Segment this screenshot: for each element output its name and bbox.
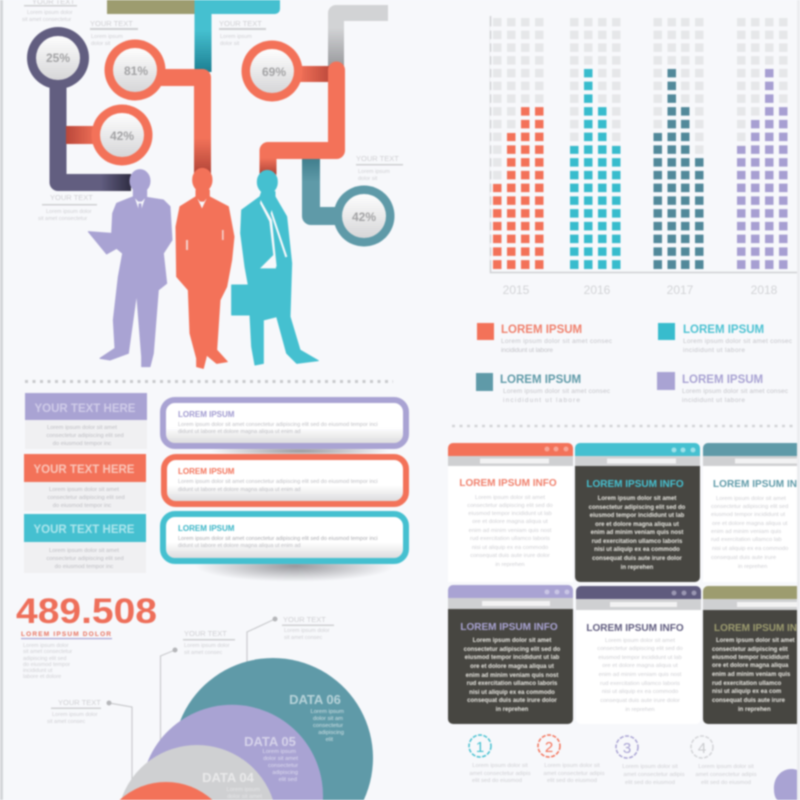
left edge strip bbox=[0, 0, 3, 800]
window 6: consectetur adipiscing elit bbox=[712, 647, 788, 653]
teal pipe bbox=[194, 0, 280, 72]
circle data 05 bbox=[141, 705, 323, 800]
bar group 2018 bbox=[734, 18, 790, 269]
paragraph under number: incididunt ut bbox=[23, 668, 53, 674]
window 3: in reprehen bbox=[738, 564, 767, 570]
leader: data 06: sit amet consec bbox=[284, 635, 322, 641]
leader lines bbox=[47, 615, 334, 780]
panel: text cards left bbox=[24, 393, 147, 573]
percentage: 42% right bbox=[334, 186, 394, 246]
step 2: Lorem ipsum dolor sit bbox=[544, 763, 600, 769]
caption 81%: Lorem ipsum bbox=[91, 34, 123, 40]
bar group 2016 bbox=[567, 18, 623, 269]
window 4: enim ad minim veniam quis nost bbox=[466, 673, 558, 679]
window 3 bbox=[703, 443, 797, 582]
window 6: ore et dolore magna aliqua bbox=[712, 663, 789, 669]
window 1: enim ad minim veniam quis nost bbox=[469, 528, 552, 534]
legend item blue-gray: Lorem ipsum dolor sit amet consec bbox=[503, 388, 611, 395]
window 1: in reprehen bbox=[495, 562, 525, 568]
caption 81%: dolor sit bbox=[91, 41, 111, 47]
circle data 04 bbox=[121, 745, 273, 800]
window 5: eiusmod tempor incididunt ut lab bbox=[598, 655, 682, 661]
people silhouettes bbox=[88, 168, 318, 368]
connector to 42% left bbox=[66, 126, 98, 144]
caption right bbox=[356, 154, 403, 182]
leader: data 06: Lorem ipsum dolor bbox=[284, 628, 330, 634]
caption right: YOUR TEXT bbox=[356, 154, 399, 163]
olive pipe bbox=[107, 0, 199, 14]
card orange: consectetur adipiscing elit sed bbox=[47, 495, 125, 501]
legend item purple bbox=[657, 372, 789, 404]
year labels: 2017 bbox=[667, 283, 694, 297]
window 3: enim ad minim veniam quis bbox=[711, 529, 781, 535]
circle data 04: DATA 04 bbox=[202, 770, 255, 785]
paragraph under number: do eiusmod tempor bbox=[23, 662, 70, 668]
axes bbox=[490, 16, 797, 272]
window 2: rud exercitation ullamco laboris bbox=[592, 539, 683, 545]
panel: pipes and percentages bbox=[27, 0, 394, 246]
card purple: consectetur adipiscing elit sed bbox=[46, 433, 124, 439]
window 2: LOREM IPSUM INFO bbox=[586, 479, 684, 490]
step 4: elit sed do eiusmod bbox=[701, 780, 751, 786]
small shadow purple bbox=[210, 445, 390, 457]
window 2: ore et dolore magna aliqua ut bbox=[595, 522, 679, 528]
paragraph under number: sit amet consectetur bbox=[23, 649, 72, 655]
window 3: rud exercitation ullamco lab bbox=[711, 537, 782, 543]
window 4: ore et dolore magna aliqua ut bbox=[470, 664, 554, 670]
circle data 06: adipiscing bbox=[318, 730, 344, 736]
window 1: eiusmod tempor incididunt ut lab bbox=[468, 511, 552, 517]
legend bbox=[476, 323, 793, 404]
leader: data 04: YOUR TEXT bbox=[58, 698, 101, 707]
card teal: YOUR TEXT HERE bbox=[34, 524, 135, 536]
year labels: 2018 bbox=[751, 283, 778, 297]
card purple bbox=[25, 393, 147, 449]
step 3: Lorem ipsum dolor sit bbox=[622, 764, 678, 770]
step 1 bbox=[469, 735, 531, 784]
circle data 06: DATA 06 bbox=[289, 692, 341, 707]
window 2 bbox=[575, 443, 700, 582]
step 2 bbox=[538, 735, 605, 784]
legend item teal: LOREM IPSUM bbox=[683, 324, 764, 336]
leader: data 05 bbox=[160, 629, 235, 745]
rounded bar orange: Lorem ipsum dolor sit amet consectetur adipiscing elit sed do eiusmod tempor inci bbox=[178, 479, 378, 485]
step 4 bbox=[691, 736, 757, 786]
rounded bar purple bbox=[163, 400, 406, 446]
caption bottom left: Lorem ipsum dolor bbox=[46, 209, 92, 215]
percentage: 42% left: 42% bbox=[110, 129, 134, 143]
chart: square-unit bars bbox=[490, 16, 797, 297]
rounded bar purple: LOREM IPSUM bbox=[178, 410, 235, 419]
rounded bar teal bbox=[163, 514, 406, 561]
rounded bar teal: Lorem ipsum dolor sit amet consectetur adipiscing elit sed do eiusmod tempor inci bbox=[178, 536, 378, 542]
step 4: amet consectetur adipis bbox=[695, 772, 757, 778]
window 4 bbox=[448, 585, 573, 724]
circle data 06: Lorem ipsum bbox=[310, 709, 344, 715]
window 5: consectetur adipiscing elit sed do bbox=[597, 646, 683, 652]
card orange: Lorem ipsum dolor sit amet bbox=[49, 487, 119, 493]
connector from 69% bbox=[298, 66, 332, 82]
percentage: 69%: 69% bbox=[262, 65, 286, 79]
window 4: Lorem ipsum dolor sit amet bbox=[473, 638, 551, 644]
window 5: ore et dolore magna aliqua ut bbox=[602, 663, 678, 669]
window 4: in reprehen bbox=[496, 707, 529, 713]
paragraph under number: Lorem ipsum dolor bbox=[23, 643, 69, 649]
leader: data 04 bbox=[47, 698, 132, 780]
circle data 05: DATA 05 bbox=[244, 734, 296, 749]
circle data 05: Lorem ipsum bbox=[262, 749, 296, 755]
leader: data 04: Lorem ipsum dolor bbox=[52, 712, 98, 718]
step 2: amet consectetur adipis bbox=[543, 771, 605, 777]
leader: data 05: YOUR TEXT bbox=[184, 629, 227, 638]
caption 81%: YOUR TEXT bbox=[90, 19, 133, 28]
percentage: 25% bbox=[27, 27, 89, 89]
legend item teal: incididunt ut labore bbox=[683, 347, 745, 354]
circle data 05: dolor sit amet bbox=[263, 756, 298, 762]
card teal: do eiusmod tempor inc bbox=[55, 564, 113, 570]
window 6: enim ad minim veniam quis bbox=[712, 672, 791, 678]
window 2: Lorem ipsum dolor sit amet bbox=[598, 496, 676, 502]
window 2: nisi ut aliquip ex ea commodo bbox=[594, 547, 680, 553]
paragraph under number bbox=[23, 643, 72, 680]
step 1: 1 bbox=[476, 739, 484, 756]
window 6 bbox=[703, 586, 797, 724]
caption top left: sit amet consectetur bbox=[22, 17, 71, 23]
caption bottom left: YOUR TEXT bbox=[50, 193, 93, 202]
window 1: consequat duis aute irure dolor bbox=[470, 553, 550, 559]
person: teal with briefcase bbox=[232, 170, 318, 365]
legend item blue-gray bbox=[476, 373, 611, 404]
card orange bbox=[24, 454, 146, 511]
numbered steps bbox=[469, 735, 757, 786]
window 2: enim ad minim veniam quis nost bbox=[591, 530, 683, 536]
step 3: amet consectetur adipis bbox=[623, 772, 685, 778]
caption bottom left: sit amet consectetur bbox=[38, 216, 87, 222]
window 5: consequat duis aute irure dolor bbox=[600, 698, 680, 704]
caption right: Lorem ipsum bbox=[358, 169, 390, 175]
subtitle: LOREM IPSUM DOLOR bbox=[21, 631, 111, 638]
circle data 05: elit sed bbox=[279, 777, 297, 783]
caption 81% bbox=[90, 19, 138, 47]
window 4: rud exercitation ullamco laboris bbox=[467, 681, 558, 687]
window 5: rud exercitation ullamco laboris bbox=[600, 681, 680, 687]
step 4: 4 bbox=[698, 740, 706, 757]
window 2: in reprehen bbox=[621, 565, 654, 571]
grid gaps bbox=[490, 28, 546, 258]
step 1: amet consectetur adipis bbox=[469, 771, 531, 777]
caption right: dolor sit bbox=[358, 176, 378, 182]
window 3: ore et dolore magna aliqua ut bbox=[712, 521, 788, 527]
card purple: do eiusmod tempor inc bbox=[53, 441, 111, 447]
window 4: consectetur adipiscing elit sed do bbox=[464, 647, 561, 653]
circle data 05: consectetur bbox=[268, 763, 298, 769]
person: purple bbox=[88, 170, 172, 367]
step 1: elit sed do eiusmod bbox=[472, 778, 522, 784]
legend item orange: incididunt ut labore bbox=[501, 347, 553, 354]
window 1: Lorem ipsum dolor sit amet bbox=[475, 495, 545, 501]
panel: window cards bbox=[448, 443, 797, 724]
window 1: nisi ut aliquip ex ea commodo bbox=[472, 545, 548, 551]
window 6: Lorem ipsum dolor sit amet bbox=[716, 638, 795, 644]
dark pipe bbox=[58, 85, 131, 191]
year labels: 2015 bbox=[503, 283, 530, 297]
percentage: 42% right: 42% bbox=[352, 210, 376, 224]
step 2: 2 bbox=[545, 739, 553, 756]
window 5: nisi ut aliquip ex ea commodo bbox=[602, 689, 678, 695]
rounded bar purple: didunt ut labore et dolore magna aliqua ut enim ad bbox=[178, 429, 301, 435]
window 3: LOREM IPSUM IN bbox=[713, 479, 797, 490]
circle data 05: adipiscing bbox=[272, 770, 298, 776]
leader: data 05: sit amet consec bbox=[184, 650, 222, 656]
percentage: 81% bbox=[104, 40, 166, 100]
window 5: LOREM IPSUM INFO bbox=[586, 623, 684, 634]
bar group 2017 bbox=[650, 18, 706, 269]
circle data 04: dolor sit amet bbox=[227, 794, 262, 800]
window 1: ore et dolore magna aliqua ut bbox=[472, 519, 548, 525]
percentage: 42% left bbox=[92, 104, 152, 166]
step 1: Lorem ipsum dolor sit bbox=[472, 763, 528, 769]
step 3 bbox=[616, 736, 685, 786]
window 2: consectetur adipiscing elit sed do bbox=[589, 505, 686, 511]
window 6: nisi ut aliquip ex ea com bbox=[712, 689, 781, 695]
card orange: YOUR TEXT HERE bbox=[34, 464, 135, 476]
bar group 2015 bbox=[490, 18, 546, 269]
step 2: elit sed do eiusmod bbox=[547, 778, 597, 784]
rounded bar teal: didunt ut labore et dolore magna aliqua ut enim ad bbox=[178, 543, 301, 549]
rounded bar orange: LOREM IPSUM bbox=[178, 467, 235, 476]
window 4: LOREM IPSUM INFO bbox=[460, 622, 558, 633]
legend item orange bbox=[477, 323, 613, 354]
window 3: eiusmod tempor incididunt ut bbox=[711, 512, 786, 518]
window 6: LOREM IPSUM IN bbox=[714, 623, 797, 634]
window 5 bbox=[576, 586, 701, 724]
window 3: consectetur adipiscing elit sed bbox=[711, 504, 788, 510]
chart: nested circles bbox=[120, 658, 373, 800]
legend item teal bbox=[658, 323, 793, 354]
legend item blue-gray: LOREM IPSUM bbox=[500, 374, 581, 386]
window 5: Lorem ipsum dolor sit amet bbox=[605, 638, 675, 644]
window 5: in reprehen bbox=[625, 707, 655, 713]
window 2: eiusmod tempor incididunt ut lab bbox=[590, 513, 685, 519]
window 1: consectetur adipiscing elit sed do bbox=[467, 503, 553, 509]
panel: rounded bars right bbox=[163, 400, 406, 582]
window 5: enim ad minim veniam quis nost bbox=[599, 672, 682, 678]
legend item purple: incididunt ut labore bbox=[682, 397, 745, 404]
orange pipe from 81% bbox=[160, 78, 211, 174]
rounded bar teal: LOREM IPSUM bbox=[178, 524, 235, 533]
card teal bbox=[24, 514, 146, 573]
window 6: rud exercitation ullamco bbox=[712, 681, 782, 687]
year labels: 2016 bbox=[584, 283, 611, 297]
percentage: 81%: 81% bbox=[124, 64, 148, 78]
legend item orange: LOREM IPSUM bbox=[501, 324, 582, 336]
circle data 06: elit bbox=[326, 737, 333, 743]
right edge strip bbox=[797, 0, 800, 800]
window 1 bbox=[448, 443, 573, 582]
legend item orange: Lorem ipsum dolor sit amet consec bbox=[501, 338, 613, 345]
window 6: eiusmod tempor incididunt bbox=[712, 655, 789, 661]
gray pipe bbox=[328, 13, 388, 70]
legend item purple: Lorem ipsum dolor sit amet consec bbox=[682, 388, 789, 395]
big number: 489.508 bbox=[16, 592, 157, 631]
card purple: Lorem ipsum dolor sit amet bbox=[47, 425, 117, 431]
year labels bbox=[503, 283, 778, 297]
caption top left bbox=[22, 0, 77, 23]
step 4: Lorem ipsum dolor sit bbox=[698, 764, 754, 770]
step 3: elit sed do eiusmod bbox=[625, 780, 675, 786]
caption center: dolor sit bbox=[220, 41, 240, 47]
window 2: consequat duis aute irure dolor bbox=[592, 556, 683, 562]
legend item blue-gray: incididunt ut labore bbox=[503, 397, 580, 404]
captions around pipes bbox=[22, 0, 403, 222]
window 4: nisi ut aliquip ex ea commodo bbox=[469, 690, 555, 696]
step 3: 3 bbox=[623, 740, 631, 757]
legend item purple: LOREM IPSUM bbox=[682, 374, 763, 386]
card purple: YOUR TEXT HERE bbox=[35, 403, 136, 415]
window 6: consequat duis aute irure bbox=[712, 698, 786, 704]
paragraph under number: labore et dolore bbox=[23, 674, 61, 680]
rounded bar orange: didunt ut labore et dolore magna aliqua ut enim ad bbox=[178, 487, 301, 493]
window 4: eiusmod tempor incididunt ut lab bbox=[465, 655, 560, 661]
percentage: 69% bbox=[242, 40, 302, 102]
window 3: Lorem ipsum dolor sit amet bbox=[716, 496, 786, 502]
legend item teal: Lorem ipsum dolor sit amet consec bbox=[683, 338, 793, 345]
caption top left: Lorem ipsum dolor bbox=[27, 10, 73, 16]
percentage: 25%: 25% bbox=[46, 51, 70, 65]
rounded bar purple: Lorem ipsum dolor sit amet consectetur adipiscing elit sed do eiusmod tempor inci bbox=[178, 422, 378, 428]
divider right bbox=[452, 425, 797, 427]
caption center: Lorem ipsum bbox=[220, 34, 252, 40]
rounded bar orange bbox=[164, 457, 406, 504]
caption center bbox=[219, 19, 266, 47]
caption center: YOUR TEXT bbox=[219, 19, 262, 28]
leader: data 05: Lorem ipsum dolor bbox=[184, 643, 230, 649]
window 3: consequat duis aute irure bbox=[711, 555, 776, 561]
window 4: consequat duis aute irure dolor bbox=[467, 698, 558, 704]
blue-gray pipe bbox=[302, 155, 345, 216]
card teal: Lorem ipsum dolor sit amet bbox=[49, 548, 119, 554]
circle data 04: Lorem ipsum bbox=[226, 787, 260, 793]
circle data 06: dolor sit am bbox=[313, 716, 343, 722]
drop shadow bbox=[195, 550, 395, 582]
card teal: consectetur adipiscing elit sed bbox=[46, 556, 124, 562]
window 1: rud exercitation ullamco laboris bbox=[470, 536, 550, 542]
leader: data 04: sit amet consec bbox=[47, 719, 85, 725]
divider left bbox=[25, 380, 393, 383]
caption bottom left bbox=[38, 193, 97, 222]
orange pipe from 69% bbox=[260, 70, 336, 174]
circle data 06: consectetur bbox=[313, 723, 343, 729]
purple blob corner bbox=[774, 769, 797, 800]
card orange: do eiusmod tempor inc bbox=[53, 503, 111, 509]
person: orange bbox=[176, 168, 234, 368]
window 6: in reprehen bbox=[738, 707, 771, 713]
window 3: nisi ut aliquip ex ea commodo bbox=[712, 546, 788, 552]
leader: data 06: YOUR TEXT bbox=[283, 615, 326, 624]
circle data 03 bbox=[120, 782, 212, 800]
window 1: LOREM IPSUM INFO bbox=[459, 478, 557, 489]
leader: data 06 bbox=[247, 615, 334, 662]
circle data 06 bbox=[173, 658, 373, 800]
paragraph under number: adipiscing elit sed bbox=[23, 656, 66, 662]
